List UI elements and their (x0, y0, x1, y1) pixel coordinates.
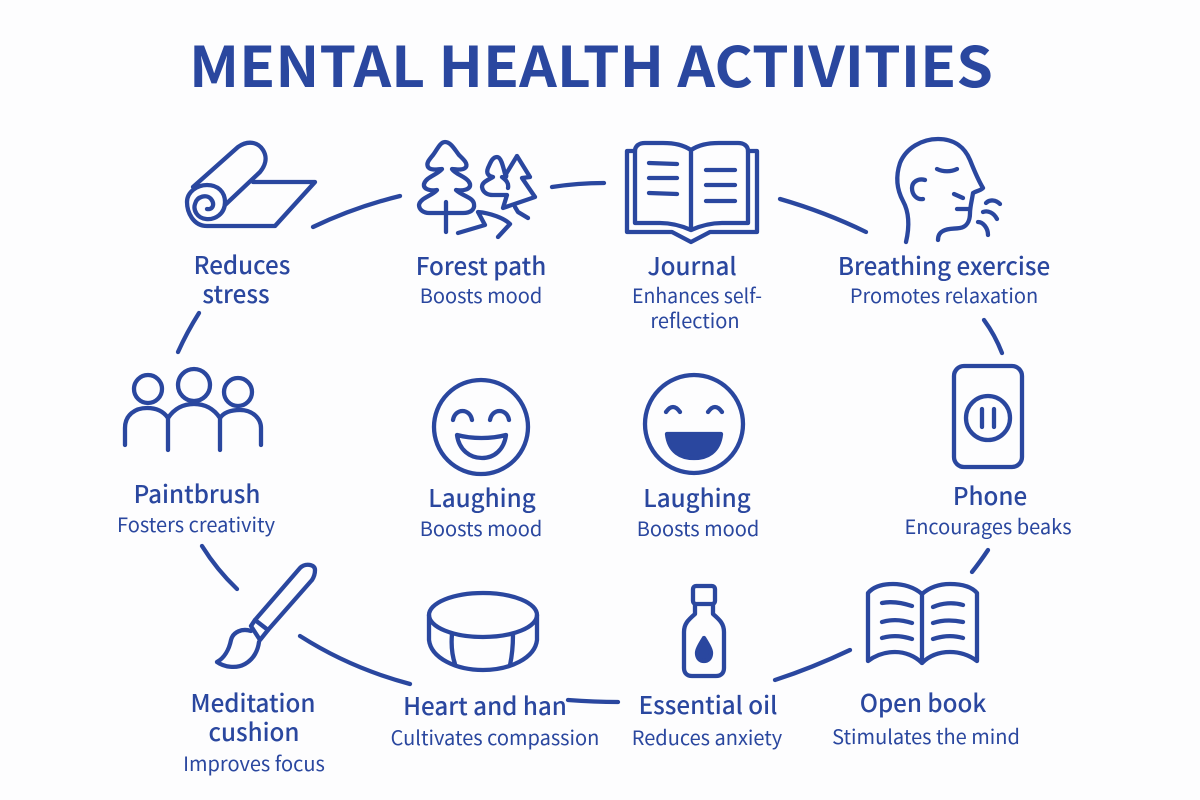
icon: yoga mat (187, 143, 315, 226)
label: breathing exercise: Breathing exercise (838, 247, 1050, 282)
label: journal: reflection (650, 305, 740, 334)
label: forest path: Forest path (416, 247, 546, 282)
label: open book (832, 684, 1020, 750)
icon: breathing head (897, 139, 1000, 242)
title: MENTAL HEALTH ACTIVITIES (189, 23, 993, 104)
label: paintbrush: Paintbrush (134, 475, 260, 510)
icon: cushion (429, 593, 537, 670)
icon: smiley left (434, 380, 528, 474)
label: meditation cushion: cushion (208, 713, 300, 748)
icon: paintbrush (217, 565, 315, 667)
label: reduces stress (194, 246, 290, 310)
label: heart and hand (391, 687, 599, 751)
label: meditation cushion: Improves focus (183, 748, 325, 777)
icon: essential oil (684, 586, 724, 676)
label: laughing right (637, 479, 759, 542)
label: journal (632, 247, 762, 334)
label: paintbrush: Fosters creativity (117, 509, 276, 538)
label: heart and hand: Heart and han (403, 687, 567, 722)
label: phone: Phone (953, 477, 1027, 512)
label: breathing exercise (838, 247, 1050, 309)
label: essential oil: Reduces anxiety (632, 722, 783, 751)
label: forest path (416, 247, 546, 309)
label: essential oil (632, 686, 783, 751)
icon: open book (868, 584, 977, 663)
label: laughing right: Boosts mood (637, 513, 759, 542)
label: laughing left: Boosts mood (420, 513, 542, 542)
label: journal: Enhances self- (632, 280, 762, 309)
label: journal: Journal (647, 247, 737, 282)
label: open book: Open book (860, 684, 986, 719)
label: laughing left (420, 479, 542, 542)
label: meditation cushion: Meditation (191, 684, 315, 719)
label: meditation cushion (183, 684, 325, 777)
icon: people (125, 369, 261, 450)
label: reduces stress: Reduces (194, 246, 290, 281)
label: heart and hand: Cultivates compassion (391, 722, 599, 751)
connector arcs (178, 183, 1002, 702)
label: paintbrush (117, 475, 276, 538)
label: forest path: Boosts mood (420, 280, 542, 309)
label: laughing right: Laughing (643, 479, 751, 514)
label: phone (904, 477, 1072, 540)
label: laughing left: Laughing (428, 479, 536, 514)
label: essential oil: Essential oil (639, 686, 777, 721)
label: breathing exercise: Promotes relaxation (850, 280, 1038, 309)
label: reduces stress: stress (202, 275, 270, 310)
icon: phone (954, 366, 1022, 467)
label: phone: Encourages beaks (904, 511, 1072, 540)
icon: smiley right (645, 375, 743, 473)
icon: journal (627, 143, 757, 242)
label: open book: Stimulates the mind (832, 721, 1020, 750)
icon: forest path (419, 142, 535, 237)
